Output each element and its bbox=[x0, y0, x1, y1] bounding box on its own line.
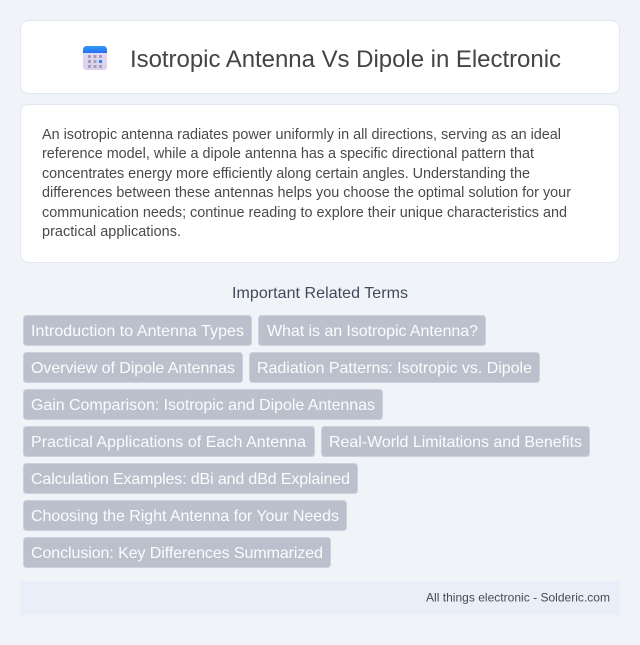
tag bbox=[250, 352, 540, 382]
tag: Gain Comparison: Isotropic and Dipole Antennas bbox=[31, 397, 375, 414]
tag bbox=[322, 426, 590, 456]
tag list bbox=[24, 316, 590, 568]
footer: All things electronic - Solderic.com bbox=[426, 590, 610, 604]
description text: communication needs; continue reading to explore their unique characteristics and bbox=[42, 205, 567, 221]
panel: header bbox=[20, 20, 620, 94]
tag bbox=[24, 538, 330, 568]
description text: practical applications. bbox=[42, 224, 181, 240]
tag: Overview of Dipole Antennas bbox=[31, 360, 235, 377]
description text: differences between these antennas helps you choose the optimal solution for your bbox=[42, 185, 571, 201]
description text: An isotropic antenna radiates power uniformly in all directions, serving as an ideal bbox=[42, 127, 561, 143]
heading: related terms: Important Related Terms bbox=[232, 285, 408, 302]
tag: Calculation Examples: dBi and dBd Explained bbox=[31, 471, 350, 488]
tag bbox=[24, 352, 242, 382]
description text: reference model, while a dipole antenna has a specific directional pattern that bbox=[42, 146, 534, 162]
tag: Introduction to Antenna Types bbox=[31, 323, 244, 340]
tag: Practical Applications of Each Antenna bbox=[31, 434, 306, 451]
tag bbox=[24, 500, 346, 530]
tag: What is an Isotropic Antenna? bbox=[267, 323, 478, 340]
tag bbox=[258, 316, 486, 346]
footer bbox=[20, 581, 620, 615]
tag: Conclusion: Key Differences Summarized bbox=[31, 545, 323, 562]
tag bbox=[24, 426, 314, 456]
panel: description bbox=[20, 104, 620, 262]
tag bbox=[24, 464, 358, 494]
tag bbox=[24, 316, 252, 346]
title: Isotropic Antenna Vs Dipole in Electronic bbox=[130, 46, 561, 73]
icon: calendar bbox=[83, 46, 107, 70]
description text: concentrates energy more efficiently along certain angles. Understanding the bbox=[42, 166, 530, 182]
tag: Choosing the Right Antenna for Your Needs bbox=[31, 508, 339, 525]
tag bbox=[24, 390, 382, 420]
description text bbox=[42, 127, 571, 240]
tag: Radiation Patterns: Isotropic vs. Dipole bbox=[257, 360, 532, 377]
tag: Real-World Limitations and Benefits bbox=[329, 434, 582, 451]
